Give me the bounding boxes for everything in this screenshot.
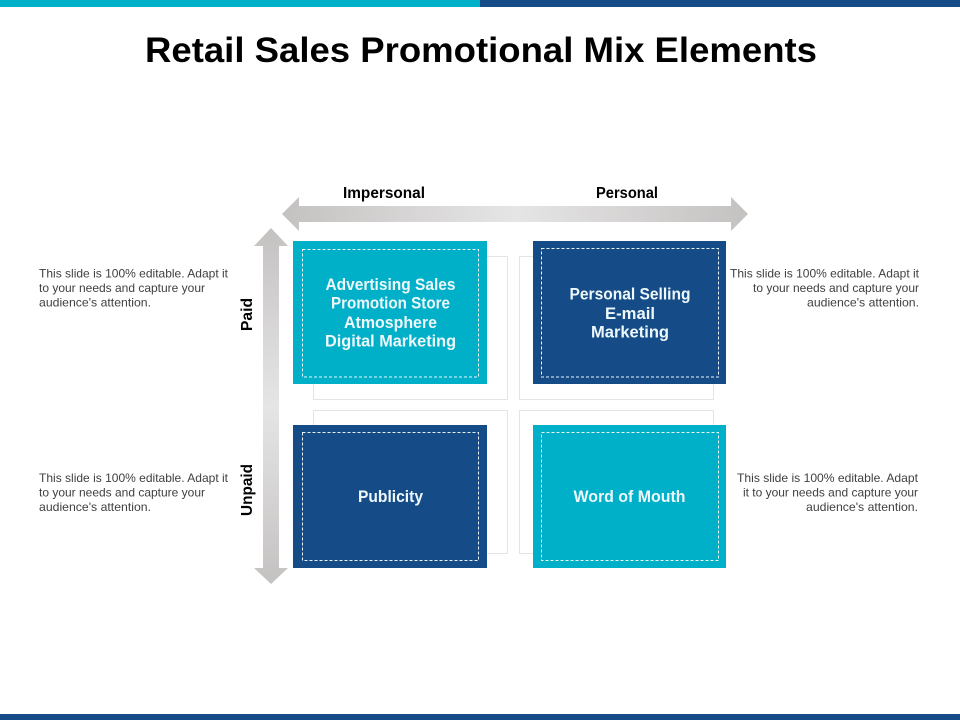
title: Retail Sales Promotional Mix Elements (145, 31, 817, 70)
text block: bottom left (39, 471, 229, 514)
bottom bar (0, 714, 960, 720)
label: Paid: Paid (239, 298, 256, 331)
label: Impersonal: Impersonal (343, 185, 425, 202)
text block: top left: audience's attention. (39, 296, 151, 310)
panel: advertising: Advertising Sales (326, 276, 456, 294)
panel: personal selling: Marketing (591, 324, 669, 342)
text block: top left: This slide is 100% editable. Adapt it (39, 266, 229, 280)
text block: bottom right: it to your needs and capture your (743, 486, 918, 500)
panel: personal selling: Personal Selling (570, 286, 690, 304)
panel: personal selling: E-mail (605, 305, 655, 323)
top bar (0, 0, 960, 7)
panel: advertising (293, 241, 508, 400)
text block: bottom left: This slide is 100% editable. Adapt it (39, 471, 229, 485)
text block: bottom left: to your needs and capture your (39, 486, 205, 500)
panel: advertising: Promotion Store (331, 294, 450, 312)
panel: personal selling (520, 241, 726, 400)
text block: top right (730, 266, 920, 310)
text block: bottom right: audience's attention. (806, 500, 918, 514)
panel: publicity: Publicity (358, 488, 424, 506)
panel: word of mouth (520, 410, 726, 568)
label: Personal: Personal (596, 185, 658, 202)
panel: publicity (293, 410, 508, 568)
text block: top right: This slide is 100% editable. Adapt it (730, 266, 920, 280)
text block: bottom right (737, 471, 919, 514)
text block: top left (39, 266, 229, 310)
text block: bottom right: This slide is 100% editable. Adapt (737, 471, 919, 485)
text block: top right: to your needs and capture your (753, 281, 919, 295)
label: Unpaid: Unpaid (239, 464, 256, 516)
arrow: vertical paid to unpaid (254, 228, 288, 584)
text block: top right: audience's attention. (807, 296, 919, 310)
panel: advertising: Atmosphere (344, 314, 437, 332)
text block: top left: to your needs and capture your (39, 281, 205, 295)
panel: word of mouth: Word of Mouth (574, 488, 686, 506)
arrow: horizontal impersonal to personal (282, 197, 748, 231)
panel: advertising: Digital Marketing (325, 332, 456, 350)
text block: bottom left: audience's attention. (39, 500, 151, 514)
